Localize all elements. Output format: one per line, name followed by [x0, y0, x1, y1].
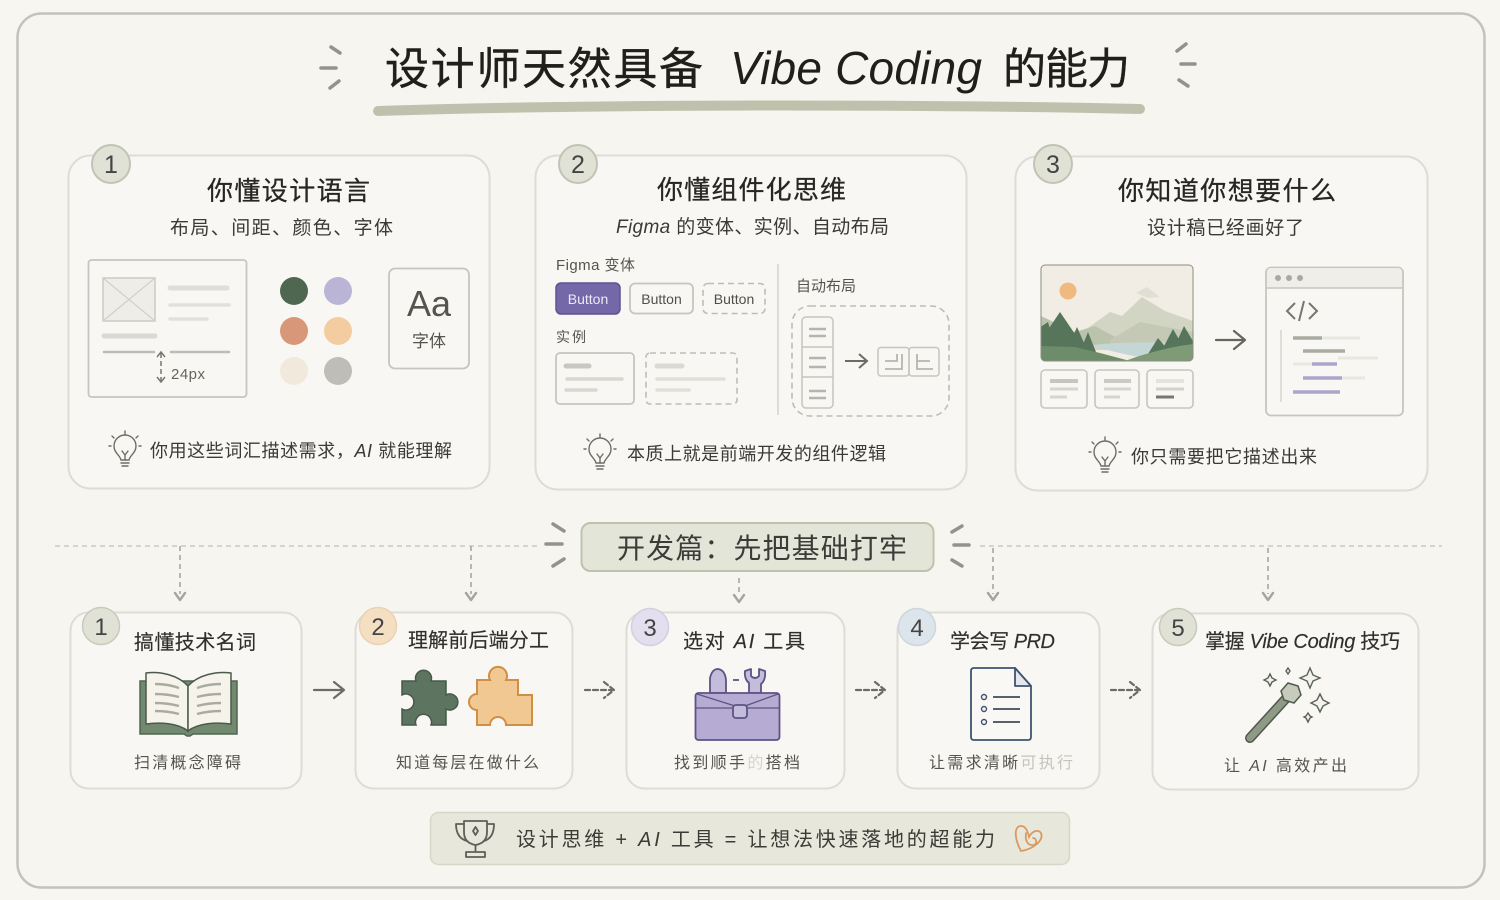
design mockup [1030, 265, 1197, 408]
section banner: 开发篇：先把基础打牢 [617, 533, 907, 564]
badge: 2 [371, 614, 385, 641]
Figma variants: Figma 变体 [556, 257, 635, 274]
caption: 让 AI 高效产出 [1224, 757, 1347, 775]
panel: design language [68, 145, 490, 488]
badge: 5 [1171, 615, 1185, 642]
heading: 你知道你想要什么 [1118, 176, 1336, 206]
icon: magic wand [1250, 668, 1329, 738]
arrow [314, 682, 344, 698]
typography card: 字体 [412, 332, 446, 351]
Figma variants: Button [714, 291, 754, 307]
card outline [1152, 614, 1418, 790]
card outline [1016, 156, 1428, 490]
typography card [389, 268, 469, 368]
title underline [378, 105, 1140, 111]
browser code window [1266, 268, 1403, 416]
icon: light bulb [1089, 437, 1121, 472]
icon: document [971, 668, 1031, 740]
Figma variants: Button [641, 291, 682, 307]
badge 1 [92, 145, 130, 183]
layout wireframe [88, 260, 246, 397]
badge 3: 3 [1046, 151, 1060, 179]
caption: 知道每层在做什么 [396, 754, 539, 772]
subheading: 布局、间距、颜色、字体 [170, 217, 393, 239]
tip text: 你用这些词汇描述需求，AI 就能理解 [150, 441, 452, 461]
badge [82, 608, 120, 644]
caption: 扫清概念障碍 [134, 753, 241, 772]
icon: puzzle pieces [402, 667, 532, 725]
badge: 4 [910, 615, 924, 642]
badge 2: 2 [571, 151, 585, 179]
step 3 [626, 608, 844, 788]
heading: 你懂设计语言 [207, 176, 370, 206]
heading: 理解前后端分工 [408, 629, 549, 652]
title accent marks right [1177, 44, 1195, 86]
tip text: 你只需要把它描述出来 [1131, 447, 1317, 467]
title: 的能力 [1003, 46, 1130, 94]
panel: know what you want [1016, 145, 1428, 490]
icon: toolbox [696, 669, 780, 740]
arrow [856, 682, 885, 698]
summary text: 设计思维 + AI 工具 = 让想法快速落地的超能力 [516, 828, 995, 851]
auto layout [792, 278, 949, 416]
arrow [585, 682, 614, 698]
instances [556, 329, 737, 404]
badge [632, 608, 668, 646]
badge 1: 1 [104, 151, 118, 179]
subheading: Figma 的变体、实例、自动布局 [616, 216, 889, 238]
auto layout: 自动布局 [796, 278, 856, 295]
title: Vibe Coding [730, 42, 982, 94]
card outline [626, 612, 844, 788]
instances: 实例 [556, 329, 586, 345]
badge [1160, 608, 1196, 646]
heading: 学会写 PRD [950, 630, 1055, 653]
icon: trophy [456, 821, 494, 857]
caption: 让需求清晰可执行 [929, 754, 1073, 772]
Figma variants [556, 257, 765, 314]
Figma variants: Button [568, 291, 608, 307]
arrow [1216, 331, 1245, 349]
badge: 3 [643, 615, 657, 642]
section connector lines [55, 546, 1442, 602]
layout wireframe: 24px [171, 366, 206, 383]
card outline [356, 612, 572, 788]
badge [360, 608, 396, 644]
step 5 [1152, 608, 1418, 790]
card outline [536, 156, 966, 490]
icon: light bulb [584, 434, 616, 469]
section accent marks right [952, 526, 969, 566]
step 2 [356, 608, 572, 788]
icon: heart [1016, 826, 1042, 851]
arrow [1111, 682, 1140, 698]
heading: 掌握 Vibe Coding 技巧 [1205, 630, 1400, 653]
icon: open book [140, 673, 237, 736]
step 1 [70, 608, 302, 788]
title [385, 42, 1130, 94]
divider [777, 264, 779, 415]
summary banner [430, 812, 1070, 864]
step 4 [898, 608, 1100, 788]
section accent marks left [546, 524, 564, 566]
typography card: Aa [407, 283, 452, 324]
tip text: 本质上就是前端开发的组件逻辑 [627, 444, 886, 464]
badge 3 [1034, 145, 1072, 183]
heading: 选对 AI 工具 [683, 630, 805, 653]
icon: light bulb [109, 431, 141, 466]
card outline [68, 156, 490, 488]
section banner [582, 523, 934, 571]
heading: 搞懂技术名词 [134, 631, 256, 654]
heading: 你懂组件化思维 [657, 175, 846, 205]
title: 设计师天然具备 [385, 45, 703, 94]
badge 2 [559, 145, 597, 183]
subheading: 设计稿已经画好了 [1147, 217, 1304, 239]
colour swatches [280, 277, 352, 385]
title accent marks left [321, 47, 340, 88]
card outline [898, 612, 1100, 788]
panel: component thinking [536, 145, 966, 490]
caption: 找到顺手的搭档 [674, 754, 800, 772]
card outline [70, 612, 302, 788]
badge [898, 608, 936, 646]
badge: 1 [94, 614, 108, 641]
